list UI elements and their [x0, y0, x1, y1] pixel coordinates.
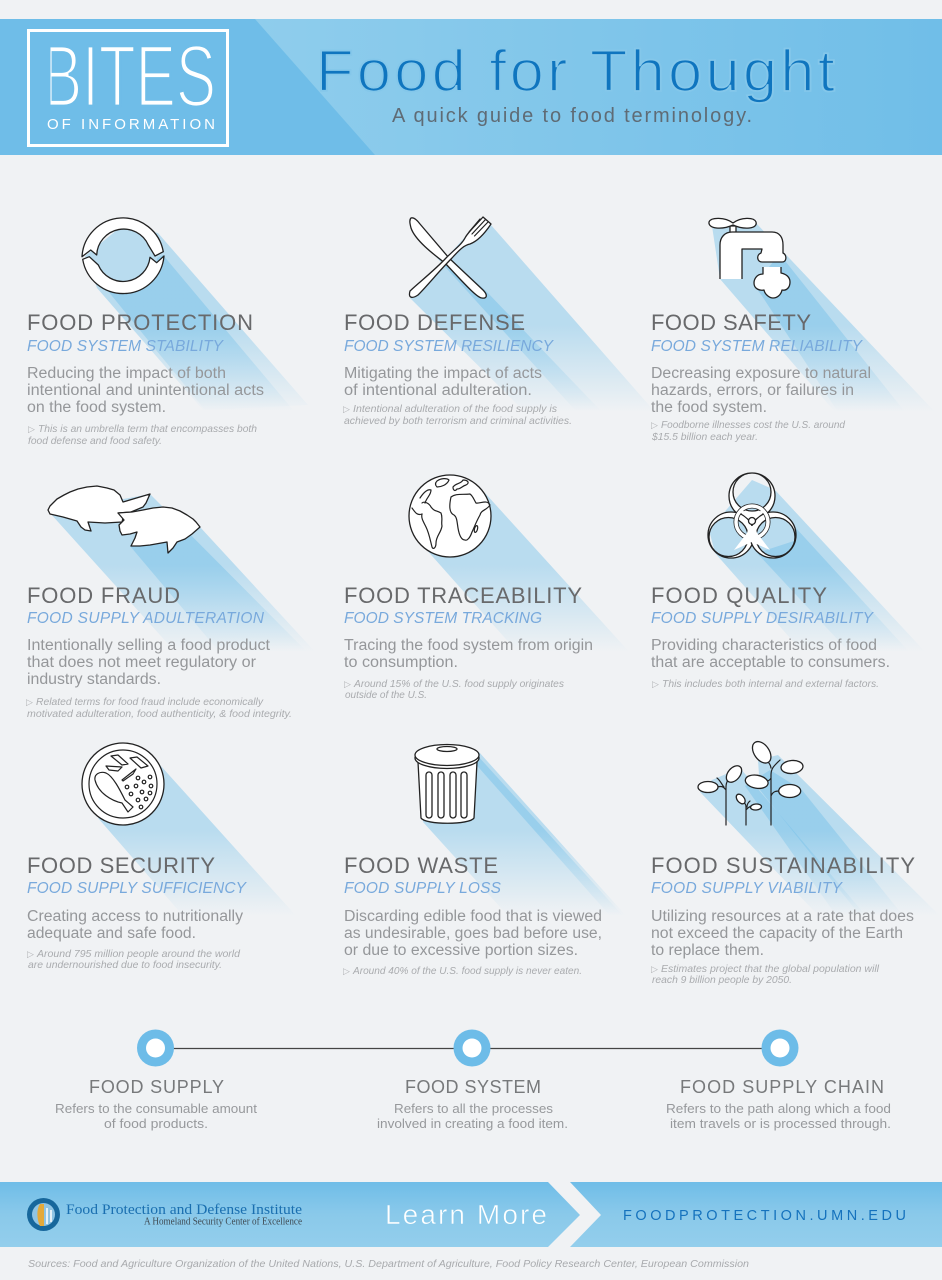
- subheading: FOOD SYSTEM STABILITY: [27, 338, 225, 355]
- node: food supply: FOOD SUPPLY: [89, 1077, 224, 1097]
- long shadow: [700, 755, 940, 918]
- icon: fish: [48, 486, 200, 553]
- description: [651, 365, 871, 416]
- description: Providing characteristics of food: [651, 637, 877, 654]
- description: [27, 637, 271, 688]
- note: are undernourished due to food insecurity.: [28, 959, 222, 971]
- node: food supply chain: FOOD SUPPLY CHAIN: [680, 1077, 884, 1097]
- node: food system: [377, 1030, 568, 1131]
- note: ▷: [28, 425, 35, 435]
- logo: bites of information: BITES: [42, 28, 216, 125]
- node: food supply: [55, 1030, 257, 1131]
- description: Mitigating the impact of acts: [344, 365, 542, 382]
- subheading: FOOD SYSTEM TRACKING: [344, 610, 542, 627]
- note: Foodborne illnesses cost the U.S. around: [661, 419, 846, 431]
- icon: plants: [698, 738, 804, 825]
- panel: food traceability: [344, 475, 632, 701]
- description: Utilizing resources at a rate that does: [651, 908, 914, 925]
- description: [651, 637, 890, 671]
- panel: food waste: [343, 744, 628, 977]
- description: Discarding edible food that is viewed: [344, 908, 602, 925]
- note: ▷: [343, 405, 350, 415]
- note: [27, 948, 241, 971]
- footer banner: [0, 1182, 942, 1247]
- long shadow: [425, 493, 632, 655]
- header banner: [0, 19, 942, 155]
- description: as undesirable, goes bad before use,: [344, 925, 602, 942]
- heading: FOOD SECURITY: [27, 853, 215, 878]
- sources: Sources: Food and Agriculture Organization of the United Nations, U.S. Department of Agriculture, Food Policy Research Center, European Commission: [28, 1258, 749, 1270]
- note: outside of the U.S.: [345, 689, 427, 701]
- node: food supply: of food products.: [104, 1116, 208, 1131]
- heading: FOOD PROTECTION: [27, 310, 253, 335]
- description: [344, 637, 593, 671]
- node: food supply: Refers to the consumable amount: [55, 1101, 257, 1116]
- description: [27, 365, 264, 416]
- subheading: FOOD SUPPLY SUFFICIENCY: [27, 880, 248, 897]
- node: food supply chain: Refers to the path along which a food: [666, 1101, 891, 1116]
- node: food system: FOOD SYSTEM: [405, 1077, 541, 1097]
- heading: FOOD FRAUD: [27, 583, 180, 608]
- description: that are acceptable to consumers.: [651, 654, 890, 671]
- note: [651, 419, 846, 443]
- heading: FOOD QUALITY: [651, 583, 827, 608]
- panel: food sustainability: [651, 738, 940, 986]
- learn more: Learn More: [385, 1199, 547, 1230]
- note: ▷: [343, 967, 350, 977]
- icon: trash can: [415, 744, 479, 823]
- long shadow: [712, 223, 935, 412]
- panel: food fraud: [26, 486, 318, 720]
- description: hazards, errors, or failures in: [651, 382, 854, 399]
- heading: FOOD TRACEABILITY: [344, 583, 582, 608]
- long shadow: [418, 752, 628, 918]
- subheading: FOOD SYSTEM RESILIENCY: [344, 338, 555, 355]
- note: [344, 678, 565, 701]
- note: Related terms for food fraud include economically: [36, 696, 264, 708]
- node: food system: involved in creating a food item.: [377, 1116, 568, 1131]
- logo: food protection and defense institute: Food Protection and Defense Institute: [66, 1202, 302, 1218]
- subheading: FOOD SUPPLY LOSS: [344, 880, 502, 897]
- note: Around 795 million people around the world: [36, 948, 241, 960]
- panel: food defense: [343, 217, 655, 427]
- description: Tracing the food system from origin: [344, 637, 593, 654]
- long shadow: [85, 225, 308, 410]
- description: [27, 908, 243, 942]
- note: ▷: [651, 421, 658, 431]
- note: ▷: [27, 950, 34, 960]
- note: ▷: [651, 965, 658, 975]
- timeline of definitions: [55, 1030, 891, 1131]
- description: not exceed the capacity of the Earth: [651, 925, 903, 942]
- note: achieved by both terrorism and criminal activities.: [344, 415, 572, 427]
- note: reach 9 billion people by 2050.: [652, 974, 792, 986]
- description: [344, 908, 602, 959]
- title: Food for Thought: [316, 39, 838, 104]
- note: This is an umbrella term that encompasses both: [38, 423, 257, 435]
- description: intentional and unintentional acts: [27, 382, 264, 399]
- note: ▷: [344, 680, 351, 690]
- note: Around 15% of the U.S. food supply originates: [353, 678, 565, 690]
- note: Estimates project that the global population will: [661, 963, 880, 975]
- note: [28, 423, 257, 447]
- icon: globe: [409, 475, 491, 557]
- note: Intentional adulteration of the food supply is: [353, 403, 558, 415]
- panel: food quality: [651, 473, 928, 690]
- long shadow: [50, 494, 318, 655]
- panel: food security: [27, 743, 298, 971]
- description: or due to excessive portion sizes.: [344, 942, 578, 959]
- subheading: FOOD SUPPLY DESIRABILITY: [651, 610, 875, 627]
- panel: food safety: [651, 218, 935, 443]
- note: food defense and food safety.: [28, 435, 162, 447]
- subtitle: A quick guide to food terminology.: [392, 105, 752, 127]
- description: that does not meet regulatory or: [27, 654, 256, 671]
- node: food supply chain: item travels or is processed through.: [670, 1116, 891, 1131]
- heading: FOOD WASTE: [344, 853, 498, 878]
- note: This includes both internal and external factors.: [662, 678, 879, 690]
- heading: FOOD DEFENSE: [344, 310, 525, 335]
- description: adequate and safe food.: [27, 925, 196, 942]
- description: Intentionally selling a food product: [27, 637, 271, 654]
- description: the food system.: [651, 399, 767, 416]
- description: Decreasing exposure to natural: [651, 365, 871, 382]
- logo: bites of information: [28, 28, 228, 146]
- node: food supply chain: [666, 1030, 891, 1131]
- url: FOODPROTECTION.UMN.EDU: [623, 1208, 906, 1224]
- heading: FOOD SAFETY: [651, 310, 811, 335]
- note: [343, 403, 572, 427]
- note: Around 40% of the U.S. food supply is never eaten.: [352, 965, 582, 977]
- subheading: FOOD SYSTEM RELIABILITY: [651, 338, 864, 355]
- icon: faucet: [709, 218, 790, 298]
- long shadow: [410, 217, 655, 412]
- description: on the food system.: [27, 399, 166, 416]
- note: motivated adulteration, food authenticity, & food integrity.: [27, 708, 292, 720]
- description: industry standards.: [27, 671, 161, 688]
- description: to replace them.: [651, 942, 764, 959]
- note: [26, 696, 292, 720]
- note: ▷: [26, 698, 33, 708]
- logo: food protection and defense institute: A Homeland Security Center of Excellence: [144, 1216, 303, 1228]
- note: ▷: [652, 680, 659, 690]
- logo: food protection and defense institute: [27, 1198, 303, 1231]
- node: food system: Refers to all the processes: [394, 1101, 554, 1116]
- note: [651, 963, 880, 986]
- panel: food protection: [27, 218, 308, 447]
- subheading: FOOD SUPPLY VIABILITY: [651, 880, 844, 897]
- icon: knife and fork: [409, 217, 491, 298]
- icon: plate of food: [82, 743, 164, 825]
- subheading: FOOD SUPPLY ADULTERATION: [27, 610, 265, 627]
- icon: circular arrows: [82, 218, 164, 294]
- long shadow: [709, 480, 928, 655]
- description: Reducing the impact of both: [27, 365, 226, 382]
- description: [344, 365, 542, 399]
- description: Creating access to nutritionally: [27, 908, 243, 925]
- long shadow: [98, 765, 298, 918]
- icon: biohazard: [708, 473, 796, 558]
- description: to consumption.: [344, 654, 458, 671]
- logo: bites of information: OF INFORMATION: [47, 116, 215, 133]
- note: $15.5 billion each year.: [651, 431, 758, 443]
- heading: FOOD SUSTAINABILITY: [651, 853, 915, 878]
- description: of intentional adulteration.: [344, 382, 532, 399]
- description: [651, 908, 914, 959]
